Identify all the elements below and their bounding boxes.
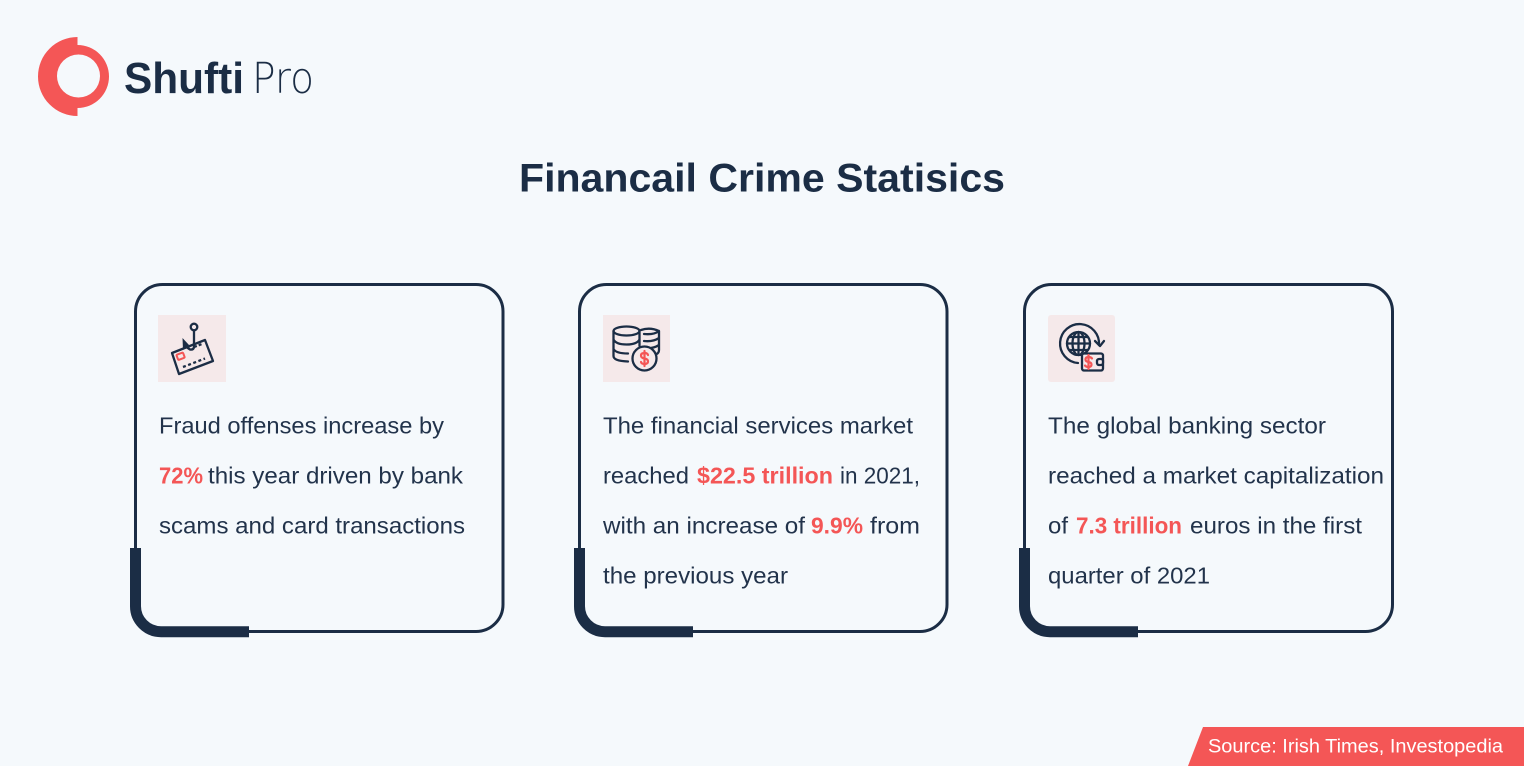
text: market statistic: with an increase of [602, 512, 805, 538]
text: banking statistic [1048, 412, 1384, 588]
text: market statistic: reached [603, 462, 689, 488]
logo: Shufti Pro [38, 37, 314, 116]
panel: fraud offenses [135, 284, 503, 632]
source banner: Source: Irish Times, Investopedia [1208, 736, 1503, 757]
text: fraud statistic: scams and card transactions [159, 512, 465, 538]
text: fraud statistic: this year driven by bank [208, 462, 463, 488]
logo wordmark: Shufti [124, 54, 244, 103]
icon: hooked credit card [158, 315, 226, 382]
text: banking statistic: 7.3 trillion [1076, 512, 1182, 538]
logo wordmark [124, 54, 314, 104]
text: market statistic: the previous year [603, 562, 788, 588]
logo mark [38, 37, 109, 116]
card frame [135, 284, 503, 632]
title: Financail Crime Statisics [519, 156, 1005, 200]
text: banking statistic: The global banking sector [1048, 412, 1326, 438]
text: market statistic: from [870, 512, 920, 538]
text: market statistic: 9.9% [811, 512, 863, 538]
panel: global banking sector [1024, 284, 1392, 632]
panel: financial services market [579, 284, 947, 632]
text: banking statistic: euros in the first [1190, 512, 1362, 538]
icon: coin stacks [603, 315, 670, 382]
text: market statistic [602, 412, 920, 588]
logo wordmark: Pro [252, 55, 314, 104]
text: fraud statistic [159, 412, 465, 538]
text: banking statistic: quarter of 2021 [1048, 562, 1210, 588]
text: banking statistic: of [1048, 512, 1068, 538]
text: fraud statistic: 72% [159, 462, 203, 488]
text: banking statistic: reached a market capitalization [1048, 462, 1384, 488]
text: market statistic: in 2021, [840, 462, 920, 488]
text: fraud statistic: Fraud offenses increase by [159, 412, 444, 438]
text: market statistic: The financial services market [603, 412, 913, 438]
text: market statistic: $22.5 trillion [697, 462, 833, 488]
source banner [1188, 727, 1524, 766]
card frame [579, 284, 947, 632]
icon: globe and wallet [1048, 315, 1115, 382]
card frame [1024, 284, 1392, 632]
